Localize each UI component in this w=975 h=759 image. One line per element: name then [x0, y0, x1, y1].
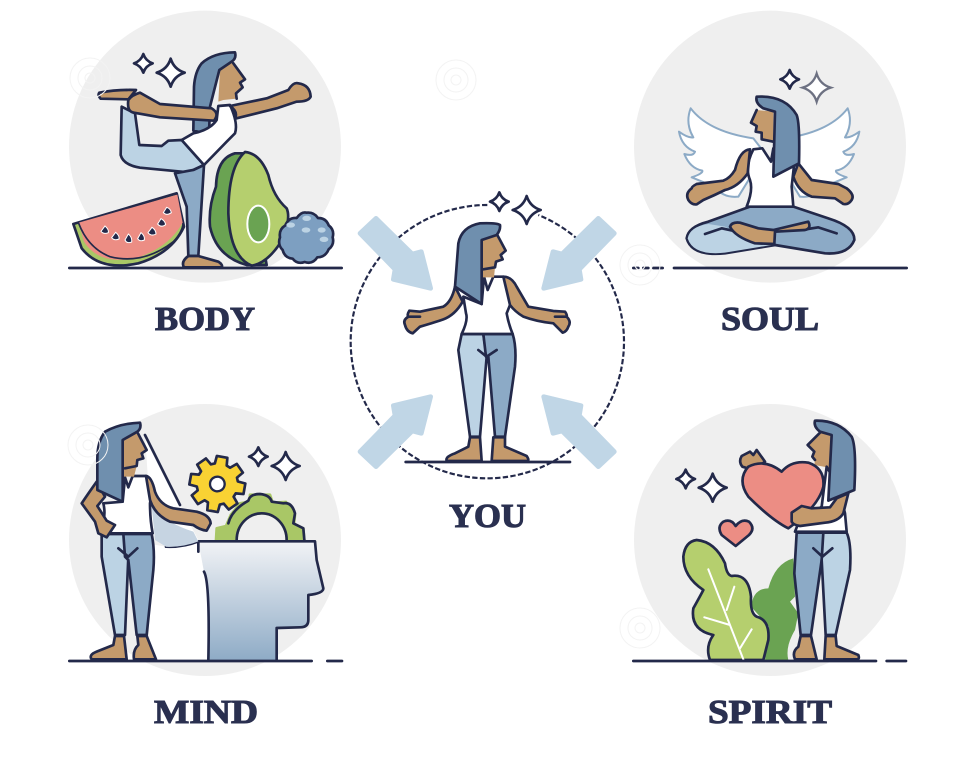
yellow gear [185, 452, 249, 516]
label: soul: SOUL [721, 301, 819, 338]
ground line [69, 657, 342, 665]
label: body: BODY [155, 301, 255, 338]
wings [679, 108, 859, 197]
head silhouette [147, 541, 323, 661]
background circle [69, 404, 341, 676]
panel: spirit [633, 404, 906, 676]
watermelon [73, 193, 184, 266]
avocado [210, 152, 288, 266]
arrow: bottom left [360, 397, 431, 467]
ground line [633, 264, 907, 272]
standing figure [82, 423, 211, 659]
panel: you [351, 192, 624, 478]
ground line [406, 458, 570, 466]
label: spirit: SPIRIT [708, 694, 832, 731]
standing figure [740, 421, 859, 659]
background circle [634, 11, 906, 283]
yoga figure [99, 52, 311, 267]
arrow: top right [544, 218, 614, 288]
dark leaf [751, 558, 798, 660]
label: you: YOU [449, 498, 526, 535]
berry [279, 212, 333, 263]
arrow: top left [360, 218, 431, 288]
sparkles [134, 54, 185, 87]
dashed circle [351, 205, 624, 478]
light leaf [683, 540, 769, 660]
sparkles [249, 447, 300, 480]
panel: soul [633, 11, 907, 283]
panel: body [69, 11, 342, 283]
label: mind: MIND [154, 694, 258, 731]
watermark spirals [68, 58, 660, 648]
green gear [216, 494, 304, 540]
ground line [69, 264, 342, 272]
panel: mind [69, 404, 342, 676]
central figure [404, 223, 570, 461]
small heart [720, 521, 752, 546]
sparkles [490, 192, 541, 224]
background circle [634, 404, 906, 676]
sparkles [676, 470, 727, 502]
background circle [69, 11, 341, 283]
seated figure [687, 97, 854, 254]
ground line [633, 657, 906, 665]
arrow: bottom right [544, 397, 614, 467]
sparkles [780, 70, 831, 102]
